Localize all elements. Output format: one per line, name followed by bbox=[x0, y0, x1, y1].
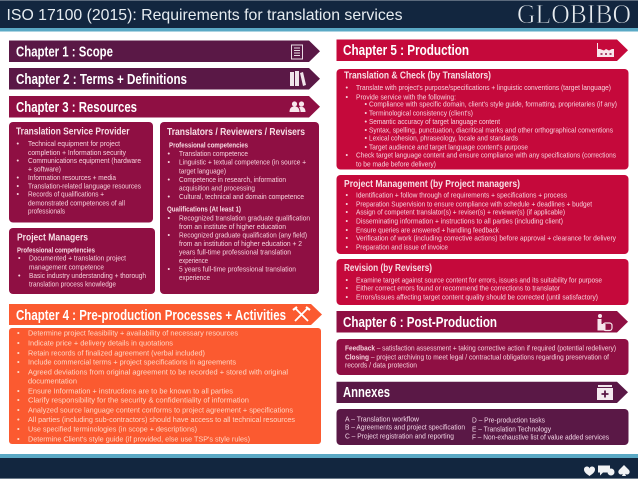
panel: project management: • bbox=[346, 208, 348, 217]
chapter 6 banner bbox=[336, 311, 628, 332]
panel: chapter 4 list: • bbox=[17, 358, 20, 367]
panel: translators reviewers revisers: 5 years full-time professional translation bbox=[179, 265, 296, 274]
panel: translation service provider: Information resources + media bbox=[28, 173, 116, 182]
panel: translation service provider: Technical equipment for project bbox=[28, 139, 120, 148]
annexes banner bbox=[336, 382, 628, 403]
panel: project management: • bbox=[346, 234, 348, 243]
panel: translators reviewers revisers: • bbox=[168, 158, 170, 167]
panel: translation and check: • bbox=[364, 143, 368, 152]
panel: translation and check: Lexical cohesion, phraseology, locale and standards bbox=[369, 134, 518, 143]
chapter 6 banner: Chapter 6 : Post-Production bbox=[343, 315, 497, 331]
panel: chapter 4 list: Include commercial terms + project specifications in agreements bbox=[28, 358, 236, 367]
panel: translators reviewers revisers: • bbox=[168, 192, 170, 201]
panel: chapter 4 list: • bbox=[17, 415, 20, 424]
panel: chapter 4 list: Determine project feasibility + availability of necessary resources bbox=[28, 328, 238, 337]
panel: translators reviewers revisers: • bbox=[168, 175, 170, 184]
panel: chapter 4 list: All parties (including sub-contractors) should have access to all technical resources bbox=[28, 415, 295, 424]
panel: translation service provider: completion + Information security bbox=[28, 148, 126, 157]
panel: revision bbox=[336, 259, 628, 305]
icon: books bbox=[290, 71, 306, 86]
chapter 5 banner: Chapter 5 : Production bbox=[343, 43, 469, 59]
panel: translation and check: Target audience and target language content's purpose bbox=[369, 143, 528, 152]
panel: project managers: Project Managers bbox=[17, 233, 88, 244]
panel: chapter 6 text: Feedback – satisfaction assessment + taking corrective action if required (potential redelivery) bbox=[345, 344, 616, 353]
panel: chapter 6 text: Closing – project archiving to meet legal / contractual obligations regarding preservation of bbox=[345, 353, 609, 362]
panel: project managers: • bbox=[18, 254, 21, 263]
chapter 4 banner bbox=[9, 304, 322, 325]
panel: translators reviewers revisers: Cultural, technical and domain competence bbox=[179, 192, 304, 201]
panel: translation and check: Syntax, spelling, punctuation, diacritical marks and other orthographical conventions bbox=[369, 126, 613, 135]
panel: translators reviewers revisers: • bbox=[168, 214, 170, 223]
panel: translation service provider: professionals bbox=[28, 207, 65, 216]
panel: project managers bbox=[9, 228, 155, 294]
panel: translation and check: • bbox=[364, 117, 368, 126]
icon: clipboard bbox=[292, 45, 302, 59]
panel: chapter 4 list: • bbox=[17, 367, 20, 376]
chapter 3 banner bbox=[9, 96, 320, 118]
panel: translation and check bbox=[336, 69, 628, 170]
panel: translation and check: • bbox=[364, 126, 368, 135]
panel: chapter 4 list: Retain records of finalized agreement (verbal included) bbox=[28, 348, 205, 357]
panel: translators reviewers revisers: acquisition and processing bbox=[179, 184, 255, 193]
panel: annexes list: B – Agreements and project specification bbox=[345, 423, 465, 432]
panel: chapter 4 list: documentation bbox=[28, 376, 77, 385]
chapter 2 banner bbox=[9, 68, 320, 90]
panel: translators reviewers revisers bbox=[160, 122, 319, 294]
panel: translation service provider: • bbox=[16, 190, 20, 199]
panel: translators reviewers revisers: from an institute of higher education bbox=[179, 222, 286, 231]
panel: translators reviewers revisers: • bbox=[168, 231, 170, 240]
panel: project management: Disseminating information + instructions to all parties (including client) bbox=[356, 217, 563, 226]
panel: chapter 4 list: Use specified terminologies (in scope + descriptions) bbox=[28, 424, 197, 433]
panel: project management bbox=[336, 175, 628, 254]
panel: translation service provider: • bbox=[16, 156, 20, 165]
panel: chapter 4 list: Indicate price + delivery details in quotations bbox=[28, 338, 173, 347]
panel: translation service provider: Communications equipment (hardware bbox=[28, 156, 141, 165]
panel: project management: Identification + follow through of requirements + specifications + process bbox=[356, 191, 567, 200]
title: ISO 17100 (2015): Requirements for translation services bbox=[6, 7, 402, 24]
panel: translators reviewers revisers: Linguistic + textual competence (in source + bbox=[179, 158, 306, 167]
panel: project managers: Professional competencies bbox=[17, 245, 95, 254]
panel: project managers: Documented + translation project bbox=[29, 254, 126, 263]
panel: translators reviewers revisers: Professional competencies bbox=[169, 140, 248, 149]
panel: revision: • bbox=[346, 284, 348, 293]
panel: project management: • bbox=[346, 226, 348, 235]
icon: folder with plus bbox=[597, 385, 613, 400]
panel: chapter 6 text bbox=[336, 339, 628, 375]
panel: project management: Verification of work (including corrective actions) before approval + clearance for delivery bbox=[356, 234, 616, 243]
panel: chapter 4 list bbox=[9, 328, 321, 444]
icon: heart, speech bubbles, spade bbox=[584, 465, 630, 476]
panel: translators reviewers revisers: • bbox=[168, 149, 170, 158]
header band bbox=[0, 0, 638, 32]
panel: chapter 4 list: • bbox=[17, 338, 20, 347]
chapter 3 banner: Chapter 3 : Resources bbox=[16, 100, 137, 116]
panel: translators reviewers revisers: experience bbox=[179, 256, 208, 265]
panel: chapter 4 list: • bbox=[17, 395, 20, 404]
panel: annexes list: C – Project registration and reporting bbox=[345, 432, 454, 441]
panel: revision: Errors/issues affecting target content quality should be corrected (until satisfactory) bbox=[356, 293, 598, 302]
panel: project management: Assign of competent translator(s) + reviser(s) + reviewer(s) (if applicable) bbox=[356, 208, 565, 217]
icon: factory bbox=[597, 43, 614, 57]
panel: project management: Preparation Supervision to ensure compliance with schedule + deadlines + budget bbox=[356, 199, 592, 208]
panel: project management: • bbox=[346, 217, 348, 226]
panel: translation and check: Translation & Check (by Translators) bbox=[344, 71, 491, 82]
panel: chapter 6 text: records / data protection bbox=[345, 361, 417, 370]
footer band bbox=[0, 454, 638, 479]
panel: translation service provider: + software) bbox=[28, 165, 61, 174]
panel: translation and check: to be made before delivery) bbox=[356, 160, 436, 169]
panel: translators reviewers revisers: Translation competence bbox=[179, 149, 248, 158]
panel: translation service provider: Translation Service Provider bbox=[16, 126, 130, 138]
chapter 2 banner: Chapter 2 : Terms + Definitions bbox=[16, 72, 187, 88]
panel: translators reviewers revisers: Qualifications (At least 1) bbox=[167, 205, 242, 214]
panel: translation and check: Check target language content and ensure compliance with any specifications (corrections bbox=[356, 151, 616, 160]
panel: chapter 4 list: Determine Client's style guide (if provided, else use TSP's style rules) bbox=[28, 434, 250, 443]
panel: revision: • bbox=[346, 276, 348, 285]
panel: chapter 4 list: • bbox=[17, 386, 20, 395]
panel: translators reviewers revisers: • bbox=[168, 265, 170, 274]
chapter 1 banner: Chapter 1 : Scope bbox=[16, 44, 113, 60]
panel: project managers: translation process knowledge bbox=[29, 280, 116, 289]
icon: people bbox=[290, 101, 306, 112]
panel: annexes list: A – Translation workflow bbox=[345, 414, 420, 423]
panel: translation service provider: • bbox=[16, 173, 20, 182]
icon: tools bbox=[293, 307, 310, 321]
panel: chapter 4 list: • bbox=[17, 348, 20, 357]
panel: project management: • bbox=[346, 191, 348, 200]
panel: revision: Examine target against source content for errors, issues and its suitability for purpose bbox=[356, 276, 602, 285]
panel: translators reviewers revisers: Recognized graduate qualification (any field) bbox=[179, 231, 307, 240]
panel: translation and check: Terminological consistency (client's) bbox=[369, 108, 473, 117]
panel: chapter 4 list: Agreed deviations from original agreement to be recorded + stored with original bbox=[28, 367, 288, 376]
panel: annexes list: E – Translation Technology bbox=[472, 424, 551, 433]
panel: translation and check: • bbox=[364, 100, 368, 109]
annexes banner: Annexes bbox=[343, 385, 390, 401]
panel: translation service provider: • bbox=[16, 139, 20, 148]
panel: revision: Revision (by Revisers) bbox=[344, 263, 432, 274]
panel: translation and check: • bbox=[346, 92, 348, 101]
panel: translation and check: Provide service with the following: bbox=[356, 92, 456, 101]
panel: translation service provider: • bbox=[16, 182, 20, 191]
panel: translators reviewers revisers: years full-time professional translation bbox=[179, 248, 291, 257]
panel: translators reviewers revisers: target language) bbox=[179, 167, 226, 176]
panel: translators reviewers revisers: Competence in research, information bbox=[179, 175, 286, 184]
chapter 5 banner bbox=[336, 40, 628, 61]
panel: revision: • bbox=[346, 293, 348, 302]
panel: project management: • bbox=[346, 243, 348, 252]
icon: person at desk bbox=[598, 314, 612, 330]
panel: translation and check: • bbox=[346, 151, 348, 160]
panel: revision: Either correct errors found or recommend the corrections to translator bbox=[356, 284, 561, 293]
panel: translation and check: Semantic accuracy of target language content bbox=[369, 117, 500, 126]
panel: project managers: • bbox=[18, 271, 21, 280]
panel: chapter 4 list: Analyzed source language content conforms to project agreement + specifications bbox=[28, 405, 293, 414]
panel: chapter 4 list: Ensure Information + instructions are to be known to all parties bbox=[28, 386, 233, 395]
panel: translation service provider: Translation-related language resources bbox=[28, 182, 141, 191]
panel: chapter 4 list: • bbox=[17, 434, 20, 443]
panel: translators reviewers revisers: Recognized translation graduate qualification bbox=[179, 214, 310, 223]
panel: translators reviewers revisers: Translators / Reviewers / Revisers bbox=[167, 127, 305, 138]
chapter 1 banner bbox=[9, 40, 320, 62]
panel: translation and check: • bbox=[364, 108, 368, 117]
panel: translators reviewers revisers: from an institution of higher education + 2 bbox=[179, 239, 302, 248]
panel: translators reviewers revisers: experience bbox=[179, 273, 210, 282]
panel: project managers: Basic industry understanding + thorough bbox=[29, 271, 146, 280]
panel: translation and check: Compliance with specific domain, client's style guide, formatting, proprietaries (if any) bbox=[369, 100, 617, 109]
panel: chapter 4 list: Clarify responsibility for the security & confidentiality of information bbox=[28, 395, 249, 404]
panel: translation service provider: demonstrated competences of all bbox=[28, 198, 125, 207]
panel: translation and check: • bbox=[346, 83, 348, 92]
panel: chapter 4 list: • bbox=[17, 405, 20, 414]
panel: project management: • bbox=[346, 199, 348, 208]
panel: translation service provider bbox=[9, 122, 153, 222]
panel: project management: Preparation and issue of invoice bbox=[356, 243, 448, 252]
panel: annexes list: F – Non-exhaustive list of value added services bbox=[472, 432, 609, 441]
panel: translation and check: Translate with project's purpose/specifications + linguistic conventions (target language) bbox=[356, 83, 611, 92]
panel: project management: Ensure queries are answered + handling feedback bbox=[356, 226, 499, 235]
chapter 4 banner: Chapter 4 : Pre-production Processes + Activities bbox=[16, 308, 286, 324]
panel: translation service provider: Records of qualifications + bbox=[28, 190, 104, 199]
panel: project managers: management competence bbox=[29, 263, 104, 272]
panel: annexes list bbox=[336, 409, 628, 445]
panel: annexes list: D – Pre-production tasks bbox=[472, 415, 545, 424]
panel: chapter 4 list: • bbox=[17, 424, 20, 433]
panel: translation and check: • bbox=[364, 134, 368, 143]
panel: project management: Project Management (by Project managers) bbox=[344, 179, 520, 190]
panel: chapter 4 list: • bbox=[17, 328, 20, 337]
